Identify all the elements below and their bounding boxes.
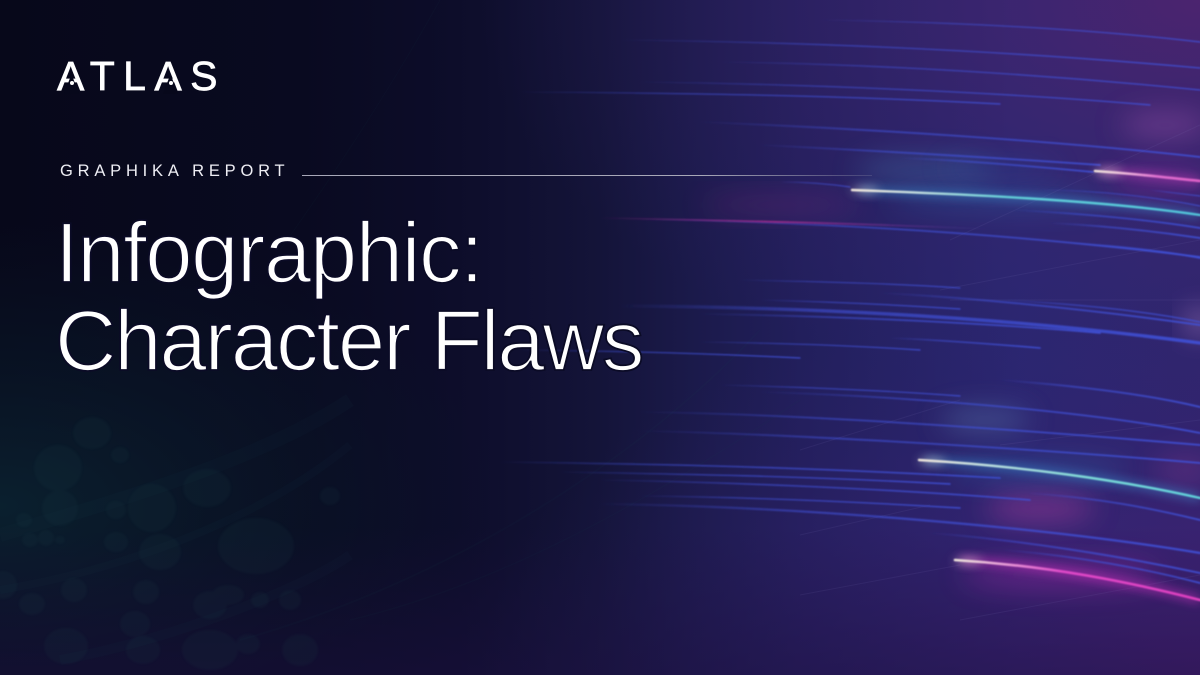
icon: left A inner counter bbox=[68, 78, 75, 82]
logo: ATLAS: ATLAS bbox=[57, 53, 226, 99]
bright streak halos bbox=[860, 171, 1200, 600]
faint sweeping arcs bbox=[0, 0, 800, 660]
icon: right A dot bbox=[168, 81, 172, 85]
icon: right A inner counter bbox=[167, 78, 174, 82]
title: Infographic: bbox=[55, 206, 482, 301]
eyebrow: Graphika Report: GRAPHIKA REPORT bbox=[60, 162, 289, 180]
divider rule bbox=[302, 175, 872, 176]
bubbles bbox=[0, 417, 340, 670]
blue streak lines bbox=[500, 20, 1200, 583]
icon: left A dot bbox=[70, 81, 74, 85]
glow blobs bbox=[700, 113, 1200, 588]
title bbox=[55, 206, 642, 389]
magenta dim streak bbox=[600, 218, 985, 229]
thin diagonal rays bbox=[800, 125, 1200, 620]
bright streaks bbox=[852, 171, 1200, 600]
streak head glows bbox=[851, 170, 1122, 563]
title: Character Flaws bbox=[55, 294, 642, 389]
